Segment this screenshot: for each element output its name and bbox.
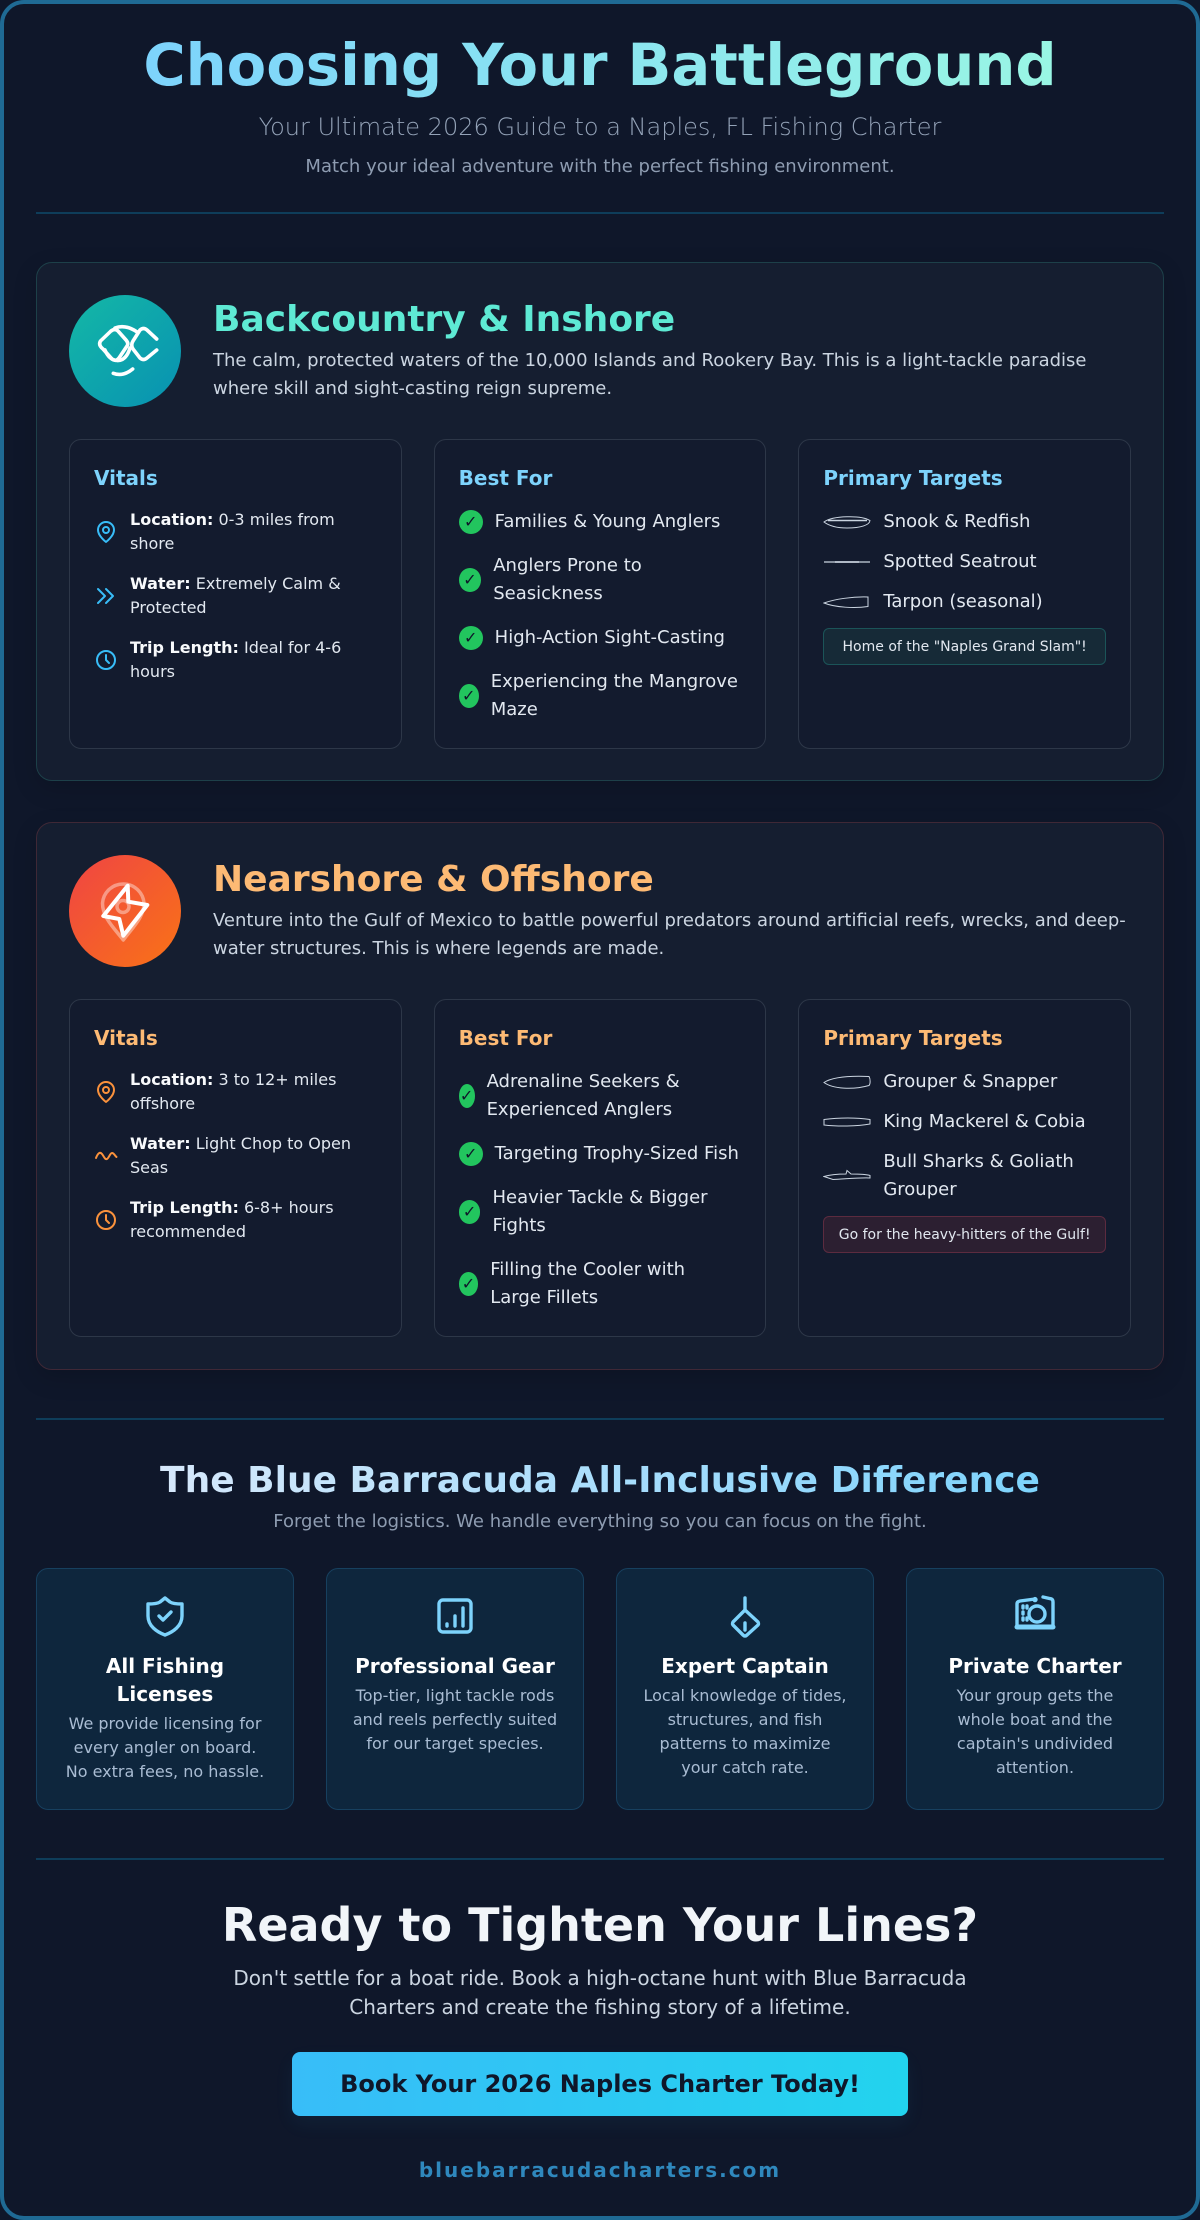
card: primary targets	[798, 999, 1131, 1336]
checklist: best for: ✓	[460, 1086, 473, 1104]
checklist: best for: Adrenaline Seekers & Experienced Anglers	[487, 1070, 680, 1120]
list: target species	[823, 510, 1043, 612]
list: target species	[823, 1070, 1086, 1200]
text: captain: Local knowledge of tides, structures, and fish patterns to maximize your catch rate.	[643, 1686, 846, 1777]
call to action heading: Ready to Tighten Your Lines?	[222, 1898, 978, 1952]
checklist: best for: ✓	[463, 1202, 476, 1220]
text: licenses: We provide licensing for every angler on board. No extra fees, no hassle.	[66, 1714, 264, 1781]
checklist: best for: High-Action Sight-Casting	[495, 626, 725, 648]
list: target species: Spotted Seatrout	[883, 550, 1037, 572]
checklist: best for: ✓	[462, 1274, 475, 1292]
list: vitals: Location: 3 to 12+ miles offshore	[130, 1070, 336, 1112]
list: target species: Grouper & Snapper	[883, 1070, 1057, 1092]
section heading: all-inclusive difference: The Blue Barracuda All-Inclusive Difference	[160, 1460, 1040, 1500]
list: vitals: Trip Length: 6-8+ hours recommended	[130, 1198, 334, 1240]
heading: backcountry: Backcountry & Inshore	[213, 299, 675, 340]
callout: Naples Grand Slam: Home of the "Naples Grand Slam"!	[843, 638, 1087, 654]
checklist: best for: ✓	[464, 1144, 477, 1162]
checklist: best for: Families & Young Anglers	[495, 510, 720, 532]
checklist: best for	[459, 1070, 739, 1308]
icon: bar chart square	[437, 1598, 473, 1634]
callout: Naples Grand Slam	[823, 628, 1106, 665]
heading: vitals: Vitals	[94, 1026, 158, 1050]
callout: heavy hitters: Go for the heavy-hitters of the Gulf!	[839, 1226, 1091, 1242]
checklist: best for: ✓	[462, 686, 475, 704]
panel: nearshore and offshore	[36, 822, 1164, 1370]
list: target species: King Mackerel & Cobia	[883, 1110, 1086, 1132]
icon: camera	[1014, 1595, 1056, 1630]
three column details: backcountry	[69, 439, 1131, 749]
checklist: best for: ✓	[463, 570, 477, 588]
card: vitals	[69, 999, 402, 1336]
feature cards row	[36, 1568, 1164, 1810]
checklist: best for: ✓	[464, 628, 477, 646]
heading: primary targets: Primary Targets	[823, 1026, 1003, 1050]
card: primary targets	[798, 439, 1131, 749]
three column details: nearshore	[69, 999, 1131, 1337]
icon: backcountry mangrove badge	[69, 295, 181, 407]
heading: vitals: Vitals	[94, 466, 158, 490]
panel header: backcountry	[69, 295, 1086, 407]
checklist: best for: Experiencing the Mangrove Maze	[491, 670, 738, 720]
card: expert captain	[616, 1568, 874, 1810]
heading: gear: Professional Gear	[355, 1654, 555, 1678]
list: vitals: Location: 0-3 miles from shore	[130, 510, 335, 552]
list: target species: Snook & Redfish	[883, 510, 1030, 532]
icon: shield check	[146, 1596, 184, 1637]
heading: primary targets: Primary Targets	[823, 466, 1003, 490]
card: best for	[434, 439, 766, 749]
section subheading: Forget the logistics. We handle everything so you can focus on the fight.	[273, 1510, 927, 1532]
icon: offshore lightning badge	[69, 855, 181, 967]
checklist: best for	[459, 510, 738, 720]
subtitle: Your Ultimate 2026 Guide to a Naples, FL Fishing Charter	[259, 113, 941, 141]
heading: nearshore: Nearshore & Offshore	[213, 859, 654, 900]
checklist: best for: Heavier Tackle & Bigger Fights	[492, 1186, 708, 1236]
card: vitals	[69, 439, 402, 749]
call to action button: Book Your 2026 Naples Charter Today!	[340, 2070, 860, 2098]
title: Choosing Your Battleground	[143, 32, 1057, 99]
checklist: best for: Anglers Prone to Seasickness	[493, 554, 642, 604]
text: gear: Top-tier, light tackle rods and reels perfectly suited for our target species.	[353, 1686, 557, 1753]
list: vitals: Trip Length: Ideal for 4-6 hours	[130, 638, 341, 680]
list: vitals: Water: Light Chop to Open Seas	[130, 1134, 351, 1176]
heading: charter: Private Charter	[948, 1654, 1122, 1678]
panel: backcountry and inshore	[36, 262, 1164, 781]
list: vitals: Water: Extremely Calm & Protected	[130, 574, 341, 616]
card: all fishing licenses	[36, 1568, 294, 1810]
heading and intro: backcountry	[212, 299, 1086, 399]
panel header: nearshore	[69, 855, 1126, 967]
heading: licenses: All Fishing Licenses	[106, 1654, 224, 1706]
call to action button	[292, 2052, 908, 2116]
checklist: best for: Filling the Cooler with Large Fillets	[490, 1258, 685, 1308]
heading and intro: nearshore	[213, 859, 1126, 959]
list: vitals	[96, 510, 341, 680]
heading: captain: Expert Captain	[661, 1654, 829, 1678]
heading: best for: Best For	[459, 1026, 552, 1050]
text: charter: Your group gets the whole boat and the captain's undivided attention.	[957, 1686, 1113, 1777]
call to action text: Don't settle for a boat ride. Book a high-octane hunt with Blue Barracuda Charters and create the fishing story of a lifetime.	[233, 1966, 967, 2018]
intro text: nearshore: Venture into the Gulf of Mexico to battle powerful predators around artificial reefs, wrecks, and deep-water structures. This is where legends are made.	[213, 910, 1126, 959]
callout: heavy hitters	[823, 1216, 1106, 1253]
list: target species: Tarpon (seasonal)	[883, 590, 1043, 612]
list: target species: Bull Sharks & Goliath Grouper	[883, 1150, 1074, 1200]
icon: lure hook	[730, 1596, 760, 1638]
checklist: best for: Targeting Trophy-Sized Fish	[495, 1142, 739, 1164]
website url: bluebarracudacharters.com	[419, 2158, 781, 2182]
checklist: best for: ✓	[464, 512, 477, 530]
card: professional gear	[326, 1568, 584, 1810]
card: private charter	[906, 1568, 1164, 1810]
list: vitals	[95, 1070, 351, 1240]
intro text: backcountry: The calm, protected waters of the 10,000 Islands and Rookery Bay. This is a light-tackle paradise where skill and sight-casting reign supreme.	[213, 350, 1086, 399]
heading: best for: Best For	[459, 466, 552, 490]
tagline: Match your ideal adventure with the perfect fishing environment.	[305, 156, 895, 176]
card: best for	[434, 999, 766, 1336]
